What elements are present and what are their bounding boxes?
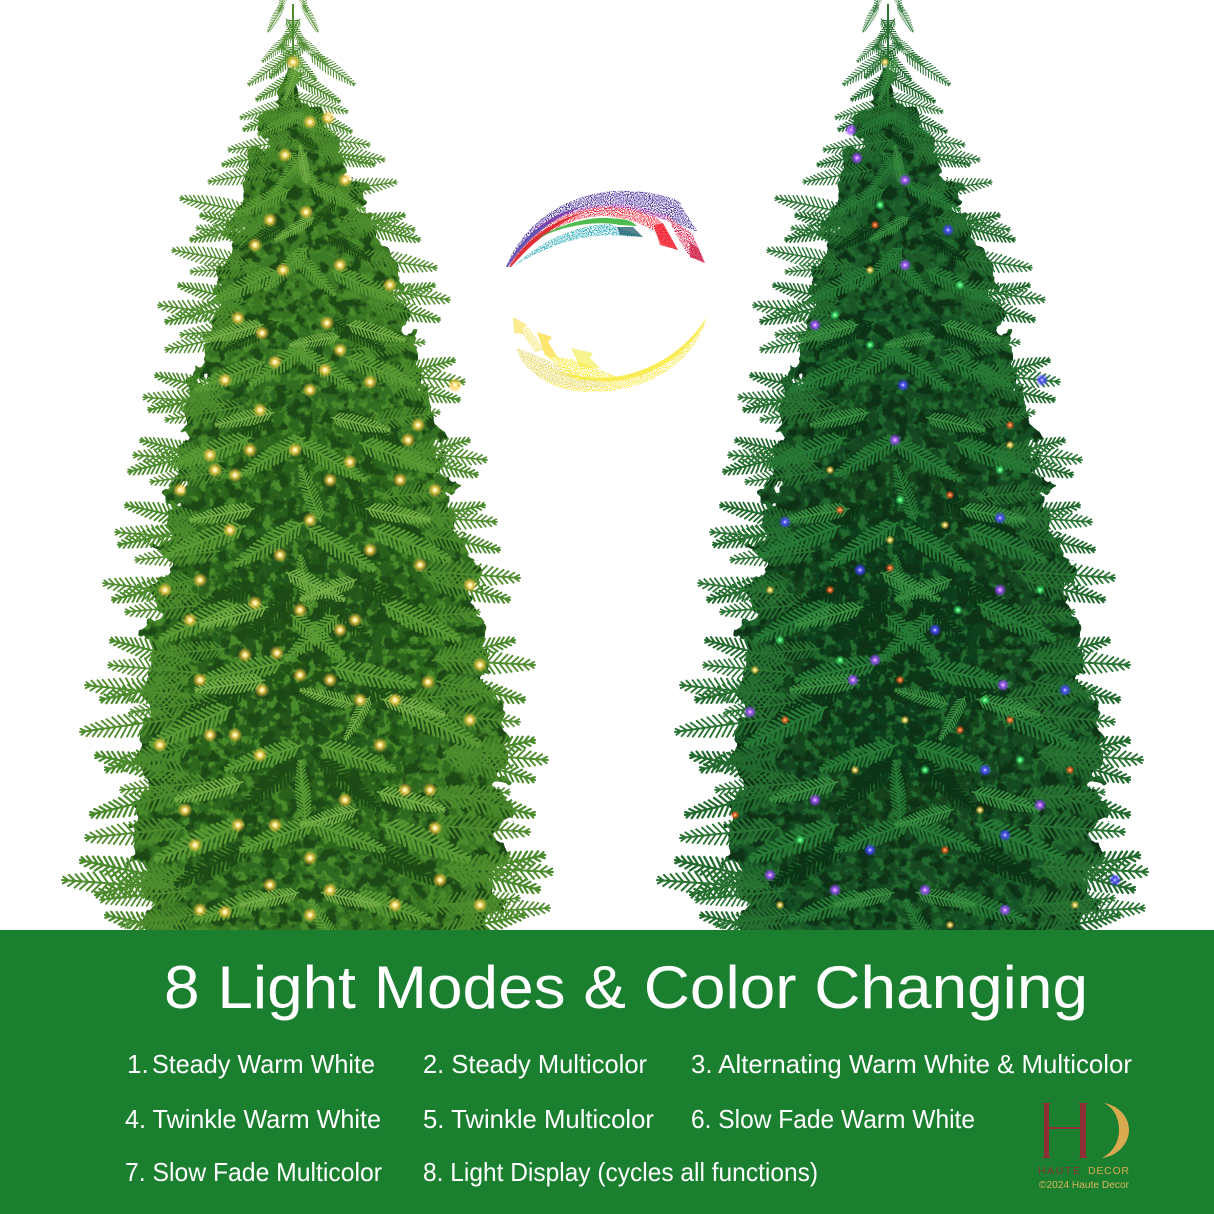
light mode list: 3. Alternating Warm White & Multicolor bbox=[691, 1049, 1132, 1079]
Haute Decor logo: DECOR bbox=[1088, 1165, 1129, 1177]
yellow arrows bbox=[513, 317, 707, 392]
Haute Decor logo: HAUTE bbox=[1038, 1165, 1080, 1177]
light mode list: 1. bbox=[127, 1049, 149, 1079]
light mode list bbox=[125, 1049, 1132, 1187]
left tree: warm white lights bbox=[61, 0, 554, 1000]
green info banner bbox=[0, 930, 1214, 1214]
multicolor lights bbox=[730, 58, 1122, 930]
Haute Decor logo bbox=[1038, 1103, 1129, 1191]
light mode list: 7. Slow Fade Multicolor bbox=[125, 1157, 382, 1187]
tree foliage: multicolor tree bbox=[656, 0, 1149, 1000]
Haute Decor logo: ©2024 Haute Decor bbox=[1039, 1179, 1129, 1191]
tree foliage: warm white tree bbox=[61, 0, 554, 1000]
rainbow arrows bbox=[506, 191, 705, 267]
light mode list: 8. Light Display (cycles all functions) bbox=[423, 1157, 818, 1187]
heading: 8 Light Modes & Color Changing bbox=[164, 954, 1088, 1021]
light mode list: 4. Twinkle Warm White bbox=[125, 1104, 381, 1134]
light mode list: 2. Steady Multicolor bbox=[423, 1049, 647, 1079]
light mode list: Steady Warm White bbox=[152, 1049, 375, 1079]
color changing arrows bbox=[506, 191, 707, 392]
warm white lights bbox=[152, 54, 488, 922]
right tree: multicolor lights bbox=[656, 0, 1149, 1000]
light mode list: 5. Twinkle Multicolor bbox=[423, 1104, 654, 1134]
light mode list: 6. Slow Fade Warm White bbox=[691, 1104, 975, 1134]
